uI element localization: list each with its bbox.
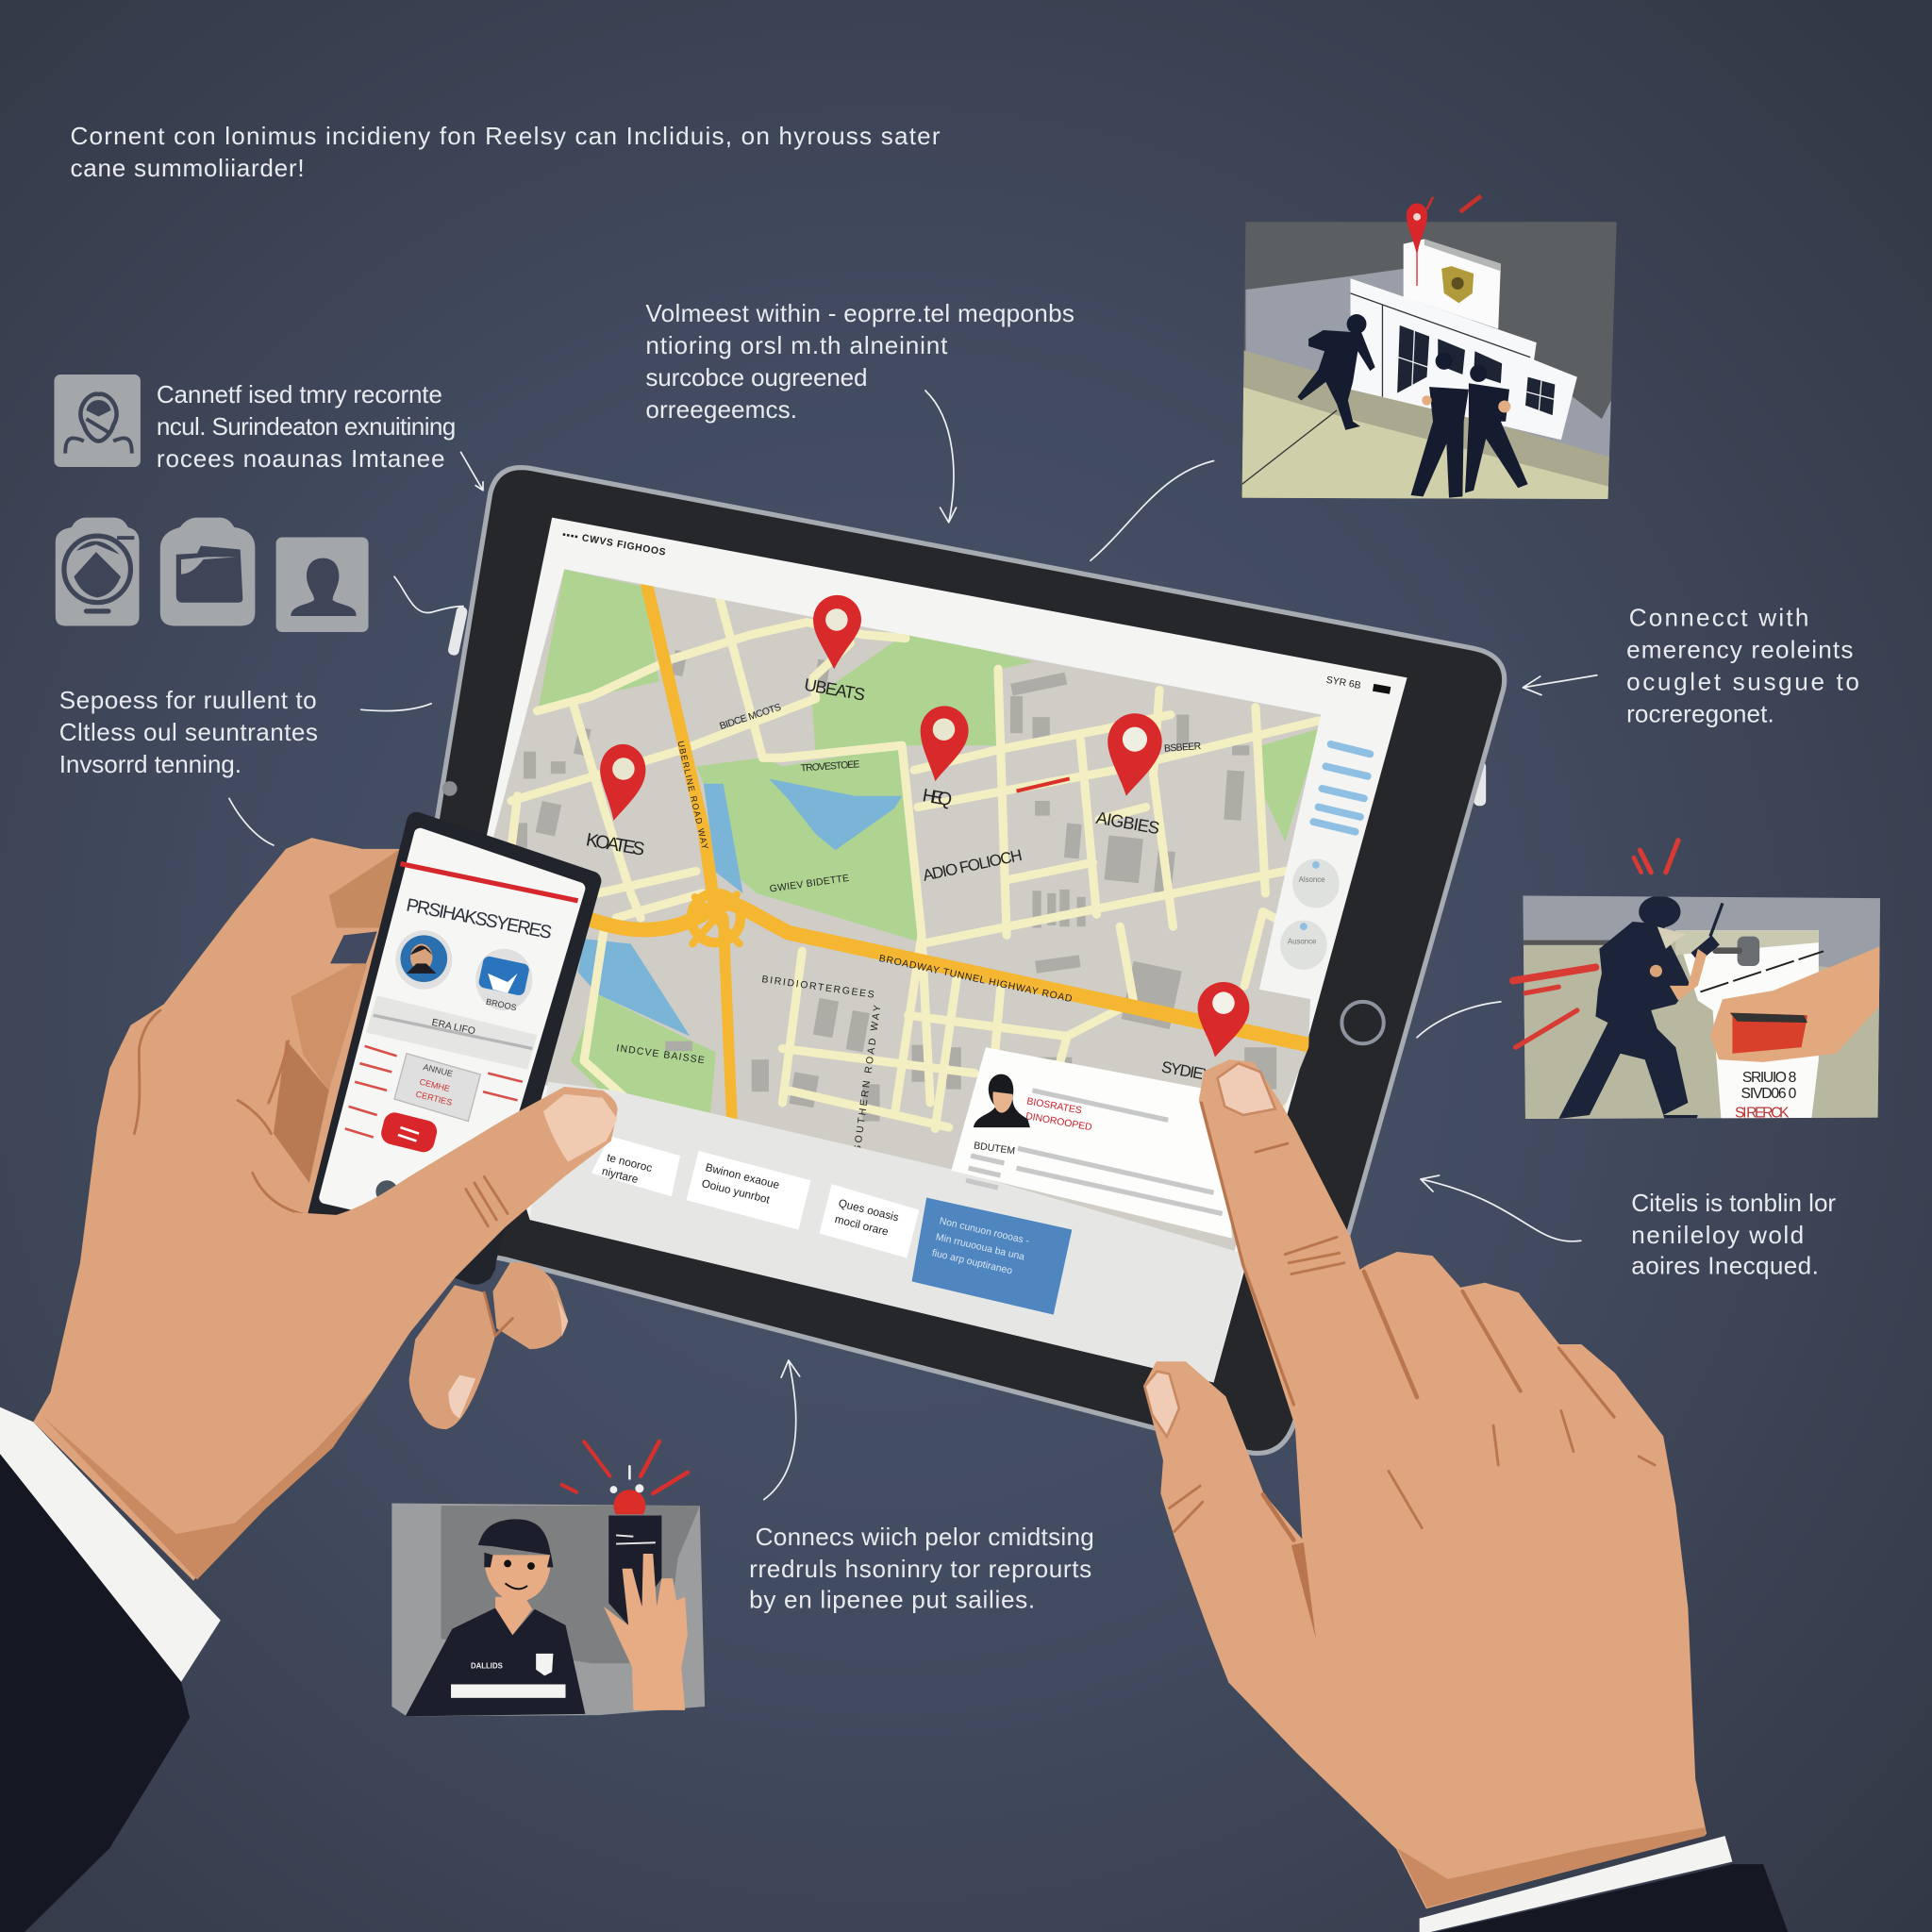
callout: left top text <box>157 380 456 473</box>
blue alert card <box>912 1198 1072 1315</box>
person info card <box>951 1047 1232 1239</box>
arrow: radio scene to tablet <box>1417 1002 1501 1038</box>
officers <box>1297 314 1528 498</box>
map labels: SYDIEY <box>1160 1058 1214 1085</box>
callout: bottom text: by en lipenee put sailies. <box>749 1585 1035 1613</box>
arrow: left text to hand <box>229 798 274 845</box>
notice paper <box>1675 930 1819 1122</box>
map labels: KOATES <box>585 829 646 860</box>
hand holding phone <box>1710 946 1880 1062</box>
home button <box>1341 1002 1384 1043</box>
phone red button <box>379 1110 440 1155</box>
red route <box>1017 778 1070 791</box>
paper text: SRIUIO 8 <box>1742 1070 1797 1086</box>
right side panel <box>1259 715 1377 1001</box>
callout: left middle text: Cltless oul seuntrantes <box>59 718 318 746</box>
status bar: ▪▪▪▪ CWVS FIGHOOS <box>561 530 666 558</box>
phone alert section: CERTIES <box>415 1090 453 1108</box>
incident card 3 <box>820 1184 919 1258</box>
incident card 1 <box>591 1136 680 1196</box>
thumb nail <box>1144 1372 1179 1437</box>
right hand <box>1144 1061 1706 1907</box>
phone screen <box>325 834 579 1232</box>
callout: left middle text: Sepoess for ruullent to <box>59 686 317 714</box>
map labels: GWIEV BIDETTE <box>769 874 850 895</box>
map labels: INDCVE BAISSE <box>616 1043 705 1066</box>
blue alert card: Min rruuooua ba una <box>935 1232 1025 1263</box>
phone alert section: ANNUE <box>423 1062 454 1078</box>
web shadow <box>1291 1542 1316 1639</box>
incident card 1: niyrtare <box>601 1165 640 1186</box>
callout: right top text: rocreregonet. <box>1626 699 1774 727</box>
right side panel: Alsonce <box>1299 875 1325 884</box>
callout: bottom text <box>749 1523 1094 1613</box>
person info card: BDUTEM <box>973 1141 1016 1157</box>
left sleeve cuff <box>0 1407 221 1682</box>
wrist shading <box>1397 1827 1706 1907</box>
incident card 1: te nooroc <box>606 1152 654 1174</box>
map labels <box>585 675 1214 1153</box>
arrow: right text to tablet <box>1523 675 1597 695</box>
phone message icon <box>475 949 532 1012</box>
map highways <box>587 585 1308 1120</box>
callout: top centre text: Volmeest within - eoprre.tel meqponbs <box>645 299 1074 327</box>
map buildings <box>515 650 1276 1122</box>
map labels: AIGBIES <box>1094 808 1161 838</box>
icon: masked face <box>54 375 141 467</box>
map water <box>578 778 902 1036</box>
intro text: cane summoliiarder! <box>70 154 305 182</box>
phone title: PRSIHAKSSYERES <box>405 895 554 943</box>
index nail <box>1217 1063 1275 1115</box>
map labels: UBEATS <box>803 675 867 705</box>
paper text <box>1736 1072 1796 1117</box>
status bar <box>561 530 1391 694</box>
right sleeve <box>1436 1864 1788 1932</box>
left hand: lower fingers <box>409 1262 568 1429</box>
hand on phone <box>604 1554 688 1710</box>
phone avatar <box>395 930 452 990</box>
tablet <box>370 468 1505 1454</box>
incident card 2 <box>687 1151 810 1230</box>
arrow: left text to bezel <box>361 704 431 711</box>
callout: right lower text: Citelis is tonblin lor <box>1631 1189 1836 1217</box>
callout: top centre text: ntioring orsl m.th alneinint <box>645 331 948 359</box>
officer: DALLIDS <box>471 1661 503 1670</box>
callout: right lower text <box>1631 1189 1836 1280</box>
station tower <box>1404 239 1501 329</box>
phone bottom button <box>375 1180 398 1203</box>
incident card 3: mocil orare <box>834 1213 891 1239</box>
left sleeve <box>0 1454 190 1932</box>
alarm phone <box>608 1516 661 1625</box>
scene: officer with alarm phone <box>391 1441 705 1716</box>
phone grey field <box>366 995 537 1070</box>
arrow: station to tablet <box>1091 460 1214 560</box>
map labels: BIRIDIORTERGEES <box>761 974 874 1001</box>
map parks <box>539 569 1321 1120</box>
alarm light <box>613 1490 645 1514</box>
callout: left top text: rocees noaunas Imtanee <box>157 444 445 473</box>
callout: left top text: ncul. Surindeaton exnuitining <box>157 412 456 441</box>
tablet screen <box>456 518 1407 1382</box>
paper text: SIVD06 0 <box>1741 1086 1797 1102</box>
callout: left top text: Cannetf ised tmry recornte <box>157 380 442 408</box>
right side panel: Ausonce <box>1288 937 1316 945</box>
alarm rays <box>562 1441 688 1493</box>
arrow: left text to tablet <box>460 452 483 491</box>
tablet body <box>370 468 1505 1454</box>
map labels: HEQ <box>921 785 954 810</box>
map labels: UBERLINE ROAD WAY <box>675 740 710 850</box>
person info card: BIOSRATES <box>1025 1096 1082 1116</box>
map pins <box>600 595 1249 1058</box>
station building <box>1351 278 1577 440</box>
officer figure <box>1558 896 1723 1124</box>
tablet camera <box>442 781 458 796</box>
blue alert card: Non cunuon roooas - <box>939 1216 1031 1247</box>
blue alert card: fiuo arp ouptiraneo <box>931 1248 1013 1276</box>
scene: police station <box>1239 196 1621 503</box>
phone header bar <box>400 864 578 901</box>
paper text: SI RERCK <box>1735 1106 1790 1122</box>
knuckle creases <box>1170 1103 1655 1541</box>
incident card 3: Ques ooasis <box>837 1197 900 1224</box>
arrow: icons to tablet <box>394 576 463 613</box>
phone <box>318 822 591 1272</box>
wrist shadow <box>43 1392 371 1579</box>
status bar: SYR 6B <box>1325 675 1361 691</box>
right cuff <box>1420 1836 1732 1932</box>
map labels: SOUTHERN ROAD WAY <box>853 1005 883 1153</box>
callout: bottom text: Connecs wiich pelor cmidtsing <box>756 1523 1094 1551</box>
intro text: Cornent con lonimus incidieny fon Reelsy can Incliduis, on hyrouss sater <box>70 122 941 150</box>
phone base <box>455 1239 499 1285</box>
map <box>493 570 1321 1251</box>
callout: top centre text <box>645 299 1074 424</box>
scene: officer with radio <box>1513 841 1885 1124</box>
arrow: bottom scene to tablet <box>764 1360 800 1500</box>
callout: left middle text <box>59 686 318 778</box>
station badge <box>1441 266 1474 303</box>
callout: left middle text: Invsorrd tenning. <box>59 750 242 778</box>
map labels: ADIO FOLIOCH <box>921 846 1024 885</box>
phone alert section: CEMHE <box>419 1077 451 1093</box>
callout: bottom text: rredruls hsoninry tor reprourts <box>749 1555 1091 1583</box>
map labels: BIDCE MCOTS <box>719 703 783 732</box>
map labels: BSBEER <box>1164 741 1202 755</box>
phone alert section <box>345 1046 523 1138</box>
incident card 2: Bwinon exaoue <box>704 1161 781 1191</box>
arrow: top text to tablet <box>925 391 957 523</box>
bottom panel <box>530 1082 1247 1382</box>
callout: right top text: ocuglet susgue to <box>1626 667 1859 695</box>
incident card 2: Ooiuo yunrbot <box>700 1177 772 1207</box>
icon: folder <box>160 518 255 626</box>
left thumb <box>246 1087 618 1392</box>
callout: right top text: emerency reoleints <box>1626 635 1853 663</box>
icon: gauge tag <box>56 518 140 626</box>
red pin marker <box>1407 204 1426 286</box>
callout: right top text <box>1626 604 1859 727</box>
callout: right lower text: nenileloy wold <box>1631 1221 1804 1249</box>
tablet side buttons <box>447 606 1486 806</box>
map roads <box>506 597 1319 1128</box>
person info card: DINOROOPED <box>1024 1111 1093 1133</box>
phone message icon: BROOS <box>485 997 518 1012</box>
phone grey field: ERA LIFO <box>431 1018 476 1037</box>
icon: person <box>276 537 369 632</box>
speed lines <box>1513 841 1678 1047</box>
intro text <box>70 122 941 182</box>
callout: right top text: Connecct with <box>1629 604 1808 632</box>
left hand: palm and fingers <box>33 838 455 1581</box>
callout: top centre text: surcobce ougreened <box>645 363 868 391</box>
callout: top centre text: orreegeemcs. <box>645 395 797 424</box>
finger shading <box>329 849 400 928</box>
arrow: lower right text to tablet <box>1421 1175 1581 1241</box>
callout: right lower text: aoires Inecqued. <box>1631 1252 1819 1280</box>
map labels: TROVESTOEE <box>800 759 860 774</box>
officer <box>406 1519 585 1716</box>
map labels: BROADWAY TUNNEL HIGHWAY ROAD <box>878 954 1074 1005</box>
gap between fingers <box>330 931 377 963</box>
